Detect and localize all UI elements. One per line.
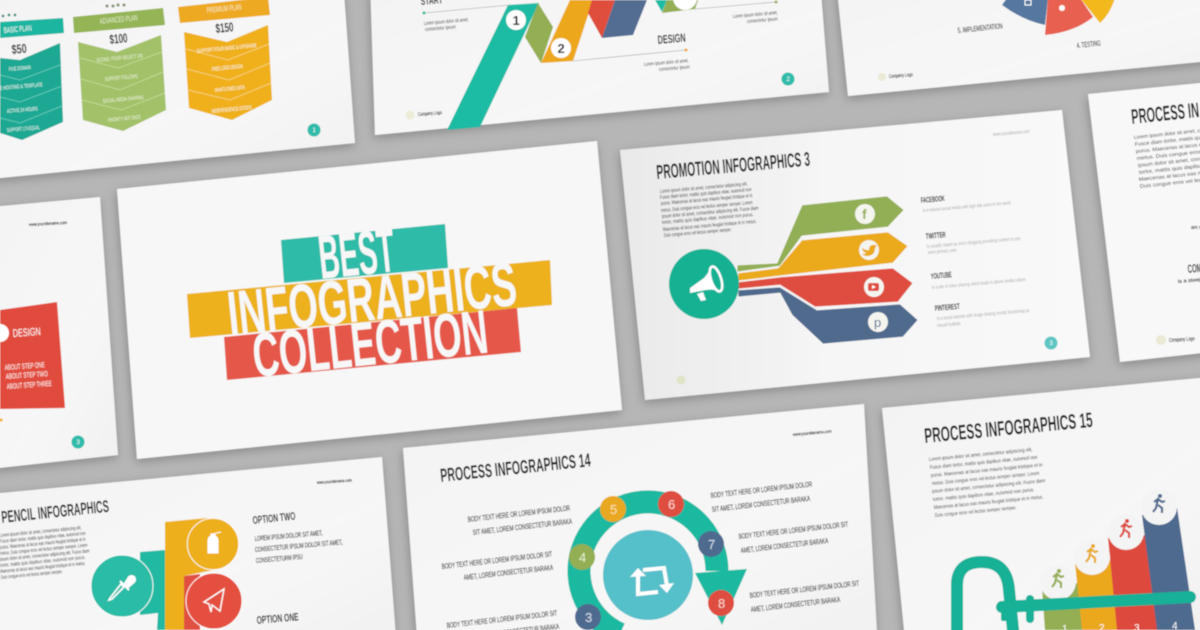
teal bar	[281, 224, 448, 283]
plan: premium: FREE LOGO DESIGN	[212, 64, 243, 73]
label: design: DESIGN	[657, 31, 686, 47]
red design panel: ABOUT STEP ONE	[5, 360, 45, 372]
label: right step: consectetur ipsum	[747, 16, 778, 25]
title text	[224, 216, 520, 391]
slide: pencil infographics	[0, 457, 397, 630]
company logo: Company Logo	[418, 110, 442, 118]
text: step 6	[710, 479, 813, 514]
label: start: Lorem ipsum dolor sit amet,	[424, 17, 469, 27]
page badge	[72, 436, 84, 448]
step 1	[506, 10, 526, 30]
body text: Lorem ipsum dolor sit amet, consectetur adipiscing elit,	[660, 181, 748, 195]
plan: premium: SUPPORT FOUR BASIC & UPGRADE	[197, 43, 257, 55]
node 3: 3	[585, 610, 592, 625]
label: pinterest: visual bulletin	[937, 321, 961, 329]
label: facebook: Is a relaxed social media with high tide users in the world	[923, 200, 1011, 214]
option two	[252, 511, 343, 565]
red pencil segment with paper plane icon	[184, 573, 242, 630]
text: step 7: BODY TEXT HERE OR LOREM IPSUM DOLOR SIT	[738, 520, 849, 541]
icon: pinterest	[868, 312, 888, 332]
label: youtube	[930, 270, 1026, 291]
company logo	[676, 376, 686, 384]
url: www.yoursitename.com	[993, 129, 1030, 138]
text: step 5: SIT AMET, LOREM CONSECTETUR BARAKA	[472, 517, 573, 537]
arrow: twitter yellow	[738, 232, 908, 281]
body text: metus. Duis congue eros vel lectus semper semper. Lorem	[661, 200, 753, 214]
plan: premium: $150	[215, 19, 234, 36]
node 6: 6	[668, 497, 675, 512]
label: testing: 4. TESTING	[1076, 39, 1101, 50]
title text: INFOGRAPHICS	[224, 250, 520, 349]
runner circle 1	[1040, 564, 1076, 600]
teal pencil segment with dropper icon	[91, 550, 165, 630]
label: facebook: FACEBOOK	[920, 194, 945, 205]
icon: pinterest: p	[874, 315, 881, 330]
heading: PENCIL INFOGRAPHICS	[0, 497, 110, 527]
page badge	[1044, 336, 1058, 350]
label: twitter: Is usually stated as micro blogging providing content to any	[927, 236, 1021, 250]
yellow dot	[0, 418, 3, 422]
body text: Maecenas at lacus eas mauris feugiat tristique et in metus.	[663, 219, 757, 233]
body text: metus. Duis congue eros vel lectus semper semper. Lorem	[932, 471, 1040, 487]
label: pinterest: PINTEREST	[934, 302, 960, 313]
plan: premium: WHATS ONES DATA	[215, 85, 245, 94]
heading: PROCESS INFOGRAPHICS 14	[439, 450, 592, 487]
bar 1 green	[1042, 583, 1083, 630]
slide: pricing plans	[0, 0, 355, 180]
body text: Maecenas at lacus eas mauris feugiat tristique et in metus.	[934, 494, 1044, 511]
body text	[660, 181, 759, 239]
plan: basic: $50	[11, 41, 27, 57]
label: facebook	[920, 194, 1011, 214]
company logo	[878, 72, 913, 81]
label: start	[420, 0, 510, 33]
text: step 6: SIT AMET, LOREM CONSECTETUR BARAKA	[711, 494, 811, 514]
page badge: 3	[76, 440, 80, 446]
body text: metus. Duis congue eros vel lectus semper semper. Lorem	[0, 543, 88, 557]
label: right step: Lorem ipsum dolor sit amet,	[733, 10, 778, 20]
body text: Fusce diam tortor, mattis quis dapibus vitae, euismod non	[930, 455, 1038, 471]
body text: tortor, mattis quis dapibus vitae, euismod non purus.	[0, 555, 86, 569]
node 4: 4	[579, 550, 586, 565]
body text: purus. Maecenas at lacus eas mauris feugiat tristique et in	[931, 462, 1043, 479]
text: step 7: AMET, LOREM CONSECTETUR BARAKA	[740, 536, 829, 555]
step 2: 2	[558, 41, 565, 56]
icon: twitter	[859, 240, 879, 260]
body text: Maecenas at lacus eas mauris feugiat tristique et in metus.	[0, 561, 86, 575]
plan: advanced: PRIORITY NOT ONCE	[108, 115, 141, 124]
node 7	[698, 531, 724, 557]
runner circle 2	[1074, 539, 1110, 575]
ribbon segments	[447, 0, 698, 130]
label: start: consectetur ipsum	[425, 24, 456, 33]
slide: promotion infographics 3	[620, 110, 1090, 400]
text: step 6: BODY TEXT HERE OR LOREM IPSUM DOLOR	[710, 479, 813, 500]
plan: basic: BASIC PLAN	[3, 24, 32, 35]
red design panel: DESIGN	[12, 326, 41, 340]
body text	[0, 525, 90, 581]
node 3	[575, 604, 601, 630]
slide: title best infographics collection	[117, 141, 622, 459]
url: www.yoursitename.com	[317, 478, 352, 485]
slide: process infographics 15	[882, 376, 1200, 630]
body text: tortor, mattis quis dapibus vitae, euismod non purus.	[662, 212, 754, 226]
label: twitter	[925, 230, 1021, 256]
step 2	[551, 38, 571, 58]
url: www.yoursitename.com	[793, 429, 832, 437]
plan: basic: ACTIVE 24 HOURS	[7, 106, 38, 115]
plan: basic: SUPPORT 174 EQUAL	[7, 125, 40, 134]
body text: purus. Maecenas at lacus eas mauris feugiat tristique et in	[661, 193, 753, 207]
label: pinterest	[934, 302, 1030, 329]
body text: Duis congue eros vel lectus semper semper.	[935, 505, 1017, 519]
option two: LOREM IPSUM DOLOR SIT AMET,	[255, 530, 323, 543]
teal tube	[957, 562, 1190, 630]
text: step 7	[738, 520, 849, 555]
plan: basic	[0, 14, 64, 140]
runner circle 3	[1108, 514, 1144, 550]
yellow pencil segment with extinguisher icon	[165, 518, 239, 630]
slide: pie chart process	[836, 0, 1200, 96]
text: step 8: AMET, LOREM CONSECTETUR BARAKA	[750, 595, 841, 614]
red bar	[224, 308, 521, 380]
slide: design cropped left	[0, 197, 118, 470]
page badge: 3	[1050, 341, 1054, 347]
company logo	[1156, 335, 1195, 345]
plan: advanced: SUPPORT FOLLOWS	[105, 74, 138, 83]
company logo	[406, 110, 442, 120]
body text: tortor, mattis quis dapibus vitae, euismod non purus.	[933, 487, 1035, 503]
url: www.yoursitename.com	[29, 220, 67, 227]
label: co: is a steep	[1178, 277, 1200, 285]
text: step 8: BODY TEXT HERE OR LOREM IPSUM DOLOR SIT	[749, 579, 860, 600]
icon: facebook	[855, 204, 875, 224]
icon: facebook: f	[862, 206, 867, 222]
text: step 3: BODY TEXT HERE OR LOREM IPSUM DOLOR SIT	[446, 608, 558, 630]
plan: premium: INDEPENDENCE GOODS	[212, 105, 252, 115]
icon: youtube	[864, 277, 884, 297]
text: step 3	[446, 608, 560, 630]
body text: Fusce diam tortor, mattis quis dapibus vitae, euismod non	[0, 531, 86, 545]
body text: Lorem ipsum dolor sit amet, consectetur adipiscing elit,	[929, 447, 1033, 463]
label: implementation: 5. IMPLEMENTATION	[957, 21, 1003, 35]
node 6	[658, 491, 684, 517]
text: step 5: BODY TEXT HERE OR LOREM IPSUM DOLOR	[467, 503, 571, 524]
runner circle 4	[1141, 489, 1177, 525]
megaphone circle	[669, 249, 739, 319]
text: step 4	[441, 549, 554, 582]
bar 3 red	[1108, 535, 1158, 630]
body text: Duis congue eros vel lectus semper semper.	[664, 227, 732, 239]
circular arrow	[579, 502, 747, 630]
plan: advanced: ADVANCED PLAN	[99, 13, 138, 26]
pie sectors	[1002, 0, 1115, 35]
option two: OPTION TWO	[252, 511, 296, 527]
label: design	[573, 31, 690, 73]
body text	[929, 447, 1046, 519]
label: design: consectetur ipsum	[659, 64, 690, 73]
bar 2 yellow	[1075, 560, 1122, 630]
plan: advanced	[73, 4, 166, 131]
text: step 4: AMET, LOREM CONSECTETUR BARAKA	[463, 563, 554, 582]
heading: PROMOTION INFOGRAPHICS 3	[656, 149, 811, 184]
node 5: 5	[610, 502, 617, 517]
arrow: pinterest blue	[738, 287, 918, 344]
red design panel: ABOUT STEP THREE	[7, 379, 52, 391]
option one: OPTION ONE	[256, 611, 299, 627]
title text: COLLECTION	[249, 298, 491, 391]
page badge: 2	[786, 77, 790, 83]
label: co	[1178, 261, 1200, 285]
node 4	[569, 544, 595, 570]
page badge: 1	[312, 128, 316, 134]
title text: BEST	[315, 216, 398, 293]
text: step 8	[749, 579, 860, 614]
plan: premium: PREMIUM PLAN	[206, 3, 242, 15]
company logo: Company Logo	[889, 72, 913, 80]
plan: advanced: $100	[109, 30, 128, 47]
label: youtube: YOUTUBE	[930, 270, 952, 281]
body text: Fusce diam tortor, mattis quis dapibus vitae, euismod non	[660, 187, 752, 201]
page badge	[782, 72, 794, 86]
arrow: youtube red	[738, 268, 913, 307]
label: design: Lorem ipsum dolor sit amet,	[644, 58, 689, 68]
bar 4 blue	[1142, 507, 1195, 630]
red design panel	[0, 302, 65, 409]
node 8	[708, 590, 734, 616]
option two: CONSECTETURM IPSU	[256, 554, 303, 565]
step 1: 1	[512, 13, 520, 28]
body text: Duis congue eros vel lectus semper semper.	[1, 569, 63, 581]
text: step 5	[467, 503, 573, 537]
label: twitter: TWITTER	[925, 230, 946, 241]
node 8: 8	[718, 596, 725, 611]
slide: process infographics cropped right	[1088, 81, 1200, 362]
red design panel: ABOUT STEP TWO	[6, 369, 48, 381]
plan: advanced: SOCIAL MEDIA SHARING	[103, 95, 144, 105]
plan: premium	[178, 0, 272, 120]
body text: ipsum dolor sit amet, consectetur adipiscing elit. Fusce diam	[662, 206, 759, 220]
text: step 4: BODY TEXT HERE OR LOREM IPSUM DOLOR SIT	[441, 549, 553, 571]
slide: timeline ribbon	[370, 0, 829, 135]
label: right step	[695, 0, 778, 25]
yellow bar	[187, 260, 552, 338]
slide: process infographics 14	[403, 404, 878, 630]
body text: purus. Maecenas at lacus eas mauris feugiat tristique et in	[0, 537, 86, 551]
label: pinterest: Is a social website with image sharing mostly functioning as	[937, 308, 1030, 322]
label: youtube: Is a site of video sharing which leads to above media culture	[932, 277, 1026, 291]
center circle with retweet icon	[603, 530, 693, 620]
option two: CONSECTETUR IPSUM DOLOR SIT AMET,	[255, 539, 343, 554]
node 5	[600, 496, 626, 522]
arrow: facebook green	[737, 196, 904, 272]
body text: ipsum dolor sit amet, consectetur adipiscing elit. Fusce diam	[932, 478, 1046, 495]
plan: advanced: ECONS. FOUR-SELECT ON	[97, 53, 143, 64]
body text: ipsum dolor sit amet, consectetur adipiscing elit. Fusce diam	[0, 548, 90, 563]
body text	[1134, 126, 1200, 190]
node 7: 7	[708, 537, 715, 552]
body text: Lorem ipsum dolor sit amet, consectetur adipiscing elit,	[0, 525, 82, 539]
plan: basic: FIVE DOMAIN	[9, 65, 31, 73]
page badge	[308, 124, 320, 136]
label: twitter: went primary user	[928, 247, 957, 256]
plan: basic: E HOSTING & TEMPLATE	[0, 82, 43, 92]
